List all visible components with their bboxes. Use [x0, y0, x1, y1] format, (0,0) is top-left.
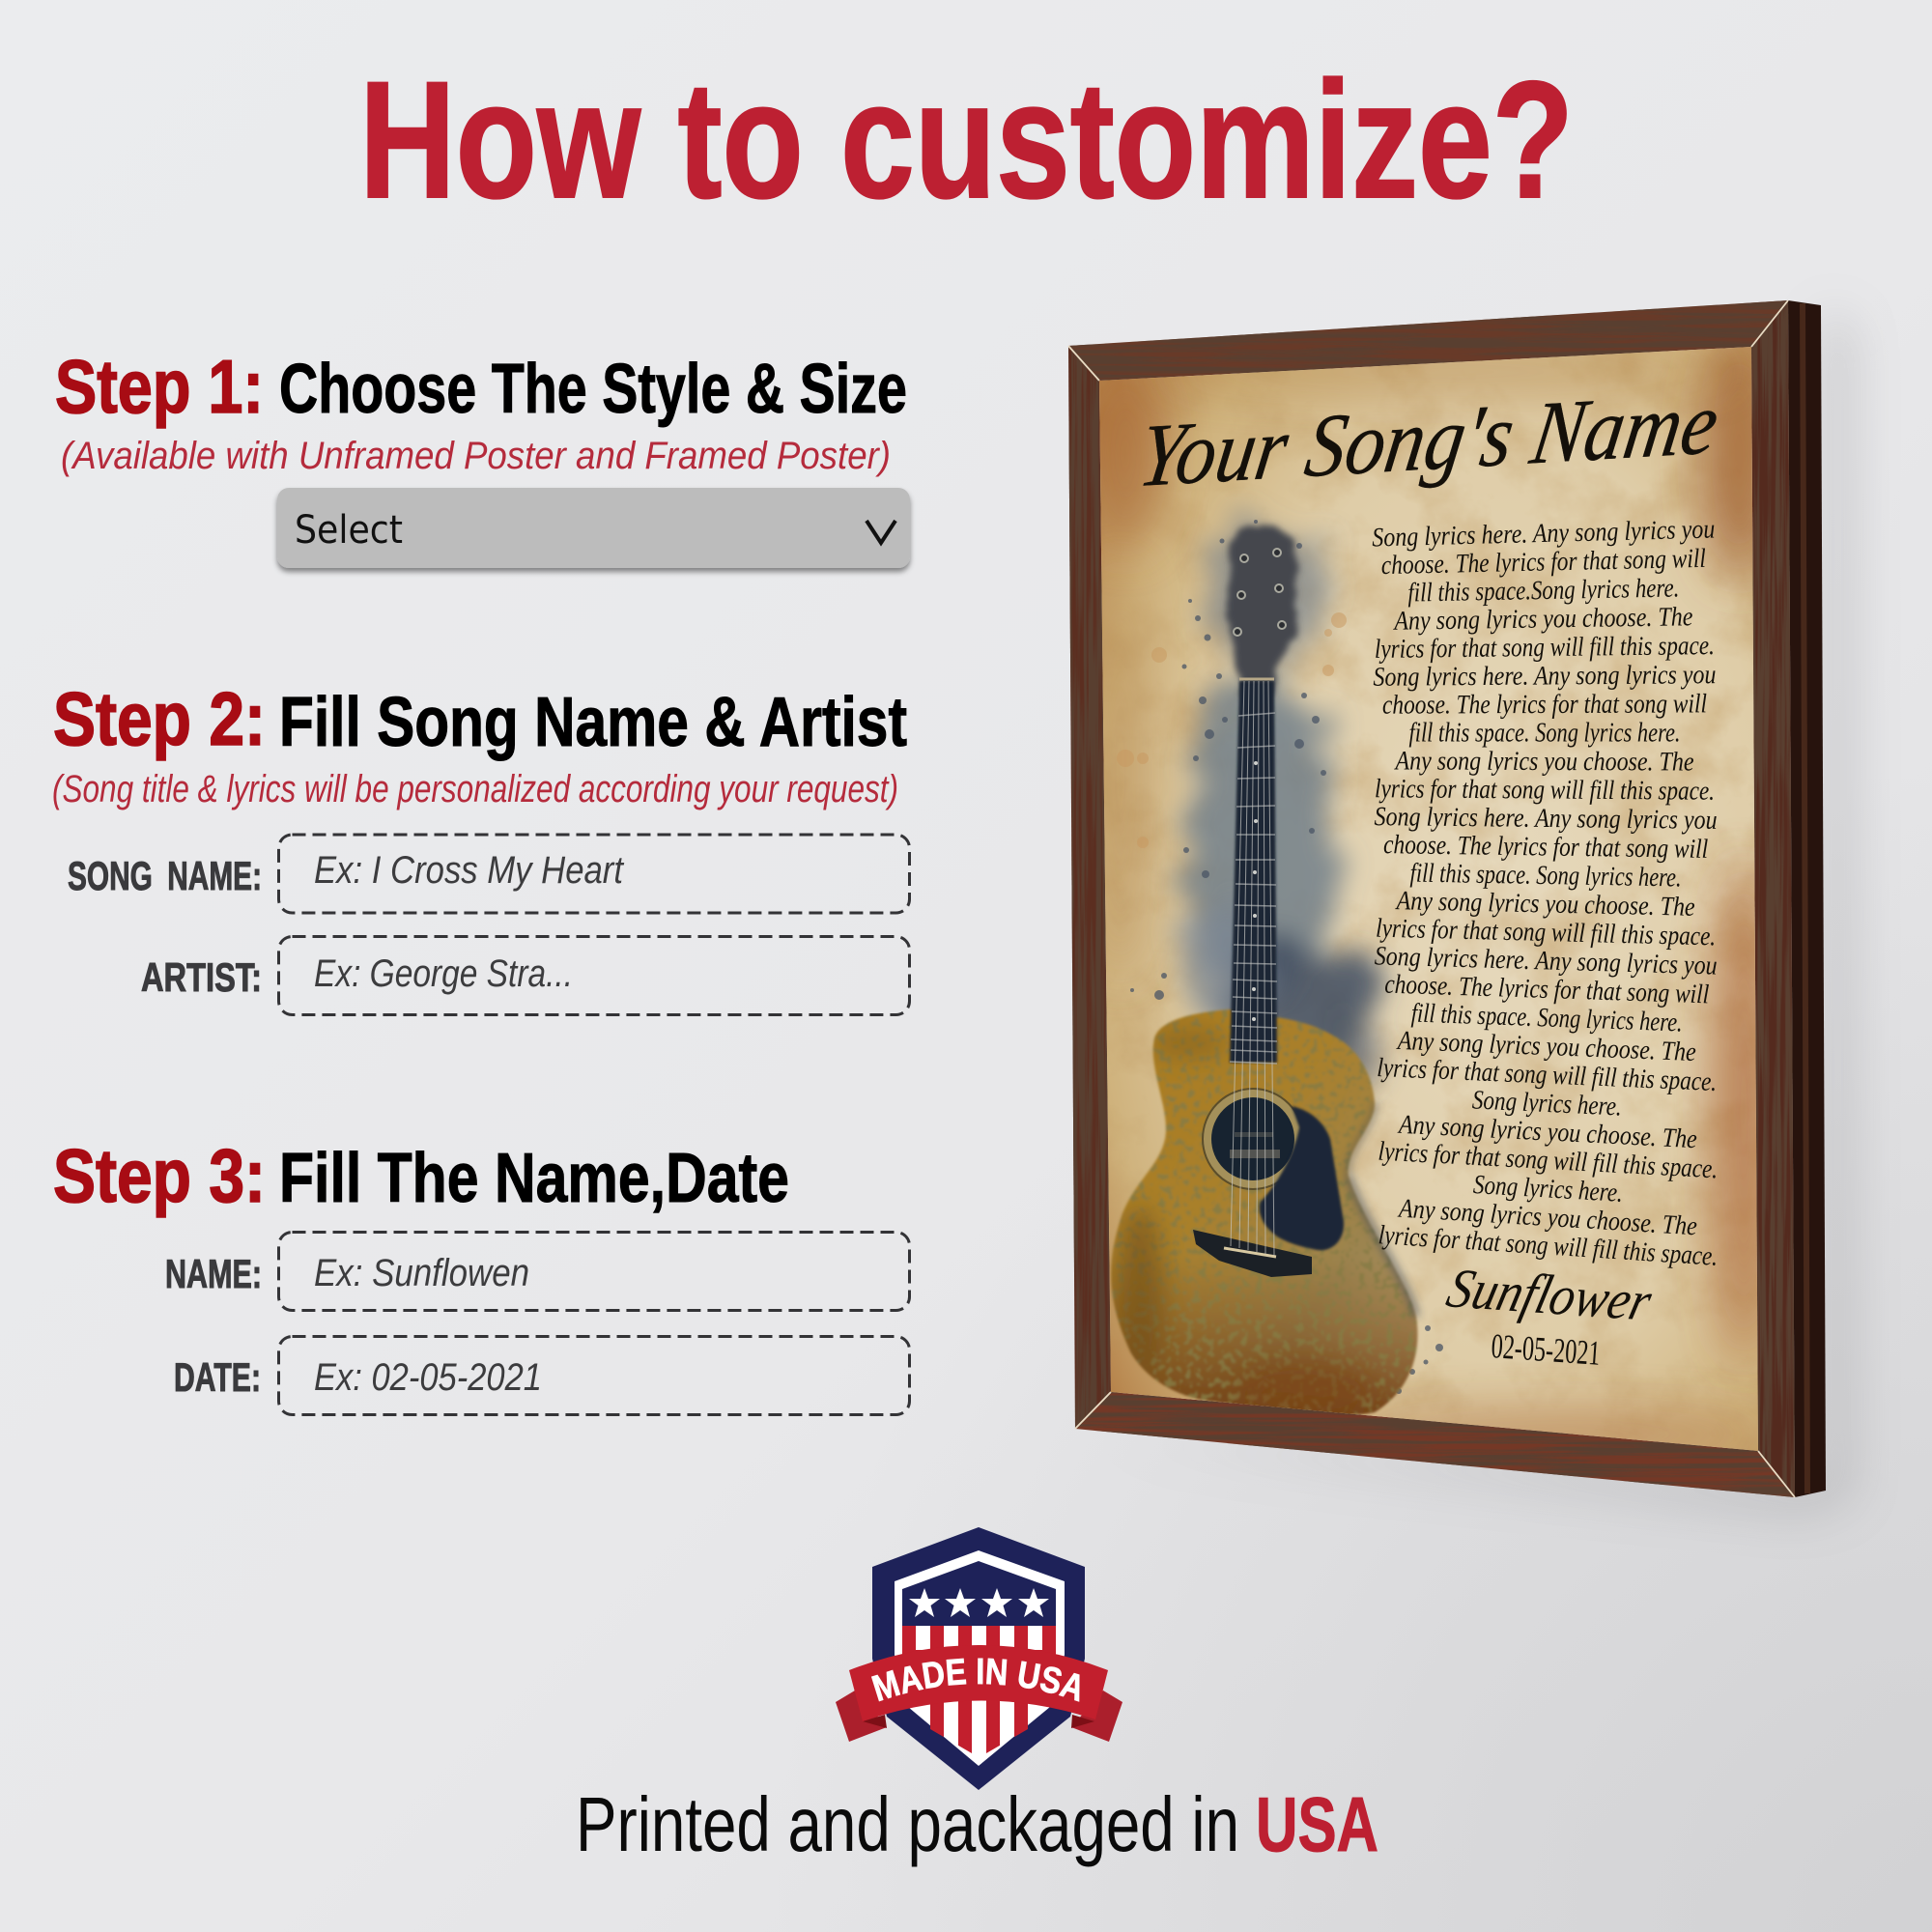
frame side edge — [1788, 300, 1826, 1497]
lyrics — [1372, 515, 1719, 1272]
ribbon — [836, 1645, 1122, 1742]
lyrics: lyrics for that song will fill this space. — [1376, 914, 1717, 952]
artist field: ARTIST: — [141, 954, 262, 1000]
lyrics: Song lyrics here. — [1471, 1085, 1623, 1122]
lyrics: lyrics for that song will fill this space. — [1375, 774, 1715, 807]
stars — [909, 1588, 1049, 1617]
lyrics: Song lyrics here. Any song lyrics you — [1372, 515, 1716, 553]
lyrics: Any song lyrics you choose. The — [1397, 1110, 1698, 1154]
wooden frame — [1063, 295, 1806, 1502]
date field: Ex: 02-05-2021 — [314, 1356, 542, 1399]
step 2 note: (Song title & lyrics will be personalized according your request) — [52, 768, 898, 810]
song name field — [68, 835, 910, 913]
select dropdown — [277, 488, 910, 568]
lyrics: Any song lyrics you choose. The — [1395, 886, 1695, 923]
name field: Ex: Sunflowen — [314, 1252, 529, 1294]
step 1 heading — [55, 344, 907, 429]
select dropdown: Select — [295, 508, 403, 553]
name field — [165, 1233, 910, 1310]
step 3 heading: Step 3: — [53, 1133, 266, 1218]
poster title: Your Song's Name — [1133, 374, 1725, 506]
step 2 heading: Step 2: — [53, 676, 266, 761]
framed poster — [1063, 295, 1850, 1512]
footer text: USA — [1256, 1781, 1378, 1867]
lyrics: Any song lyrics you choose. The — [1392, 602, 1693, 637]
step 1 heading: Choose The Style & Size — [279, 351, 907, 428]
pickguard — [1260, 1106, 1344, 1250]
frame wall shadow — [1092, 309, 1850, 1512]
lyrics: lyrics for that song will fill this space. — [1375, 631, 1715, 665]
step 2 panel — [52, 676, 910, 1014]
artist field — [141, 937, 910, 1014]
poster print — [1091, 328, 1777, 1459]
lyrics: choose. The lyrics for that song will — [1383, 830, 1709, 865]
guitar body — [1092, 1005, 1430, 1420]
step 1 panel — [55, 344, 910, 568]
lyrics: lyrics for that song will fill this space. — [1377, 1053, 1718, 1097]
lyrics: lyrics for that song will fill this space. — [1378, 1137, 1719, 1184]
lyrics: lyrics for that song will fill this space. — [1378, 1220, 1719, 1272]
date field: DATE: — [174, 1354, 261, 1400]
artist field: Ex: George Stra... — [314, 952, 573, 995]
step 2 heading: Fill Song Name & Artist — [279, 684, 907, 761]
sound hole — [1203, 1089, 1303, 1189]
lyrics: Song lyrics here. Any song lyrics you — [1373, 660, 1717, 693]
neck and headstock — [1228, 527, 1296, 1256]
parchment background — [1091, 328, 1777, 1459]
date field — [174, 1337, 910, 1414]
lyrics: Any song lyrics you choose. The — [1396, 1026, 1696, 1067]
step 3 heading: Fill The Name,Date — [279, 1140, 789, 1217]
step 2 heading — [53, 676, 907, 761]
step 1 note: (Available with Unframed Poster and Framed Poster) — [61, 435, 891, 477]
shield — [872, 1527, 1085, 1790]
lyrics: choose. The lyrics for that song will — [1382, 689, 1707, 721]
watercolor smoke — [1117, 516, 1443, 1394]
guitar illustration — [1092, 516, 1443, 1420]
bridge — [1193, 1230, 1312, 1277]
title: How to customize? — [359, 47, 1574, 233]
lyrics: choose. The lyrics for that song will — [1384, 970, 1710, 1009]
lyrics: Any song lyrics you choose. The — [1394, 746, 1694, 778]
signature name: Sunflower — [1441, 1257, 1658, 1332]
step 3 panel — [53, 1133, 910, 1414]
lyrics: fill this space. Song lyrics here. — [1410, 998, 1683, 1038]
lyrics: fill this space. Song lyrics here. — [1408, 718, 1681, 749]
song name field: SONG NAME: — [68, 853, 262, 898]
step 3 heading — [53, 1133, 789, 1218]
lyrics: fill this space.Song lyrics here. — [1407, 573, 1680, 609]
ribbon text: MADE IN USA — [871, 1658, 1080, 1702]
footer text: Printed and packaged in — [576, 1781, 1239, 1867]
step 1 heading: Step 1: — [55, 344, 264, 429]
poster date: 02-05-2021 — [1490, 1326, 1602, 1373]
lyrics: Song lyrics here. — [1472, 1170, 1624, 1208]
lyrics: Song lyrics here. Any song lyrics you — [1374, 941, 1718, 981]
lyrics: Song lyrics here. Any song lyrics you — [1374, 802, 1718, 836]
lyrics: choose. The lyrics for that song will — [1381, 544, 1706, 581]
lyrics: fill this space. Song lyrics here. — [1409, 859, 1682, 893]
song name field: Ex: I Cross My Heart — [314, 849, 625, 892]
lyrics: Any song lyrics you choose. The — [1397, 1194, 1698, 1241]
made in usa badge — [836, 1527, 1122, 1790]
name field: NAME: — [165, 1251, 262, 1296]
